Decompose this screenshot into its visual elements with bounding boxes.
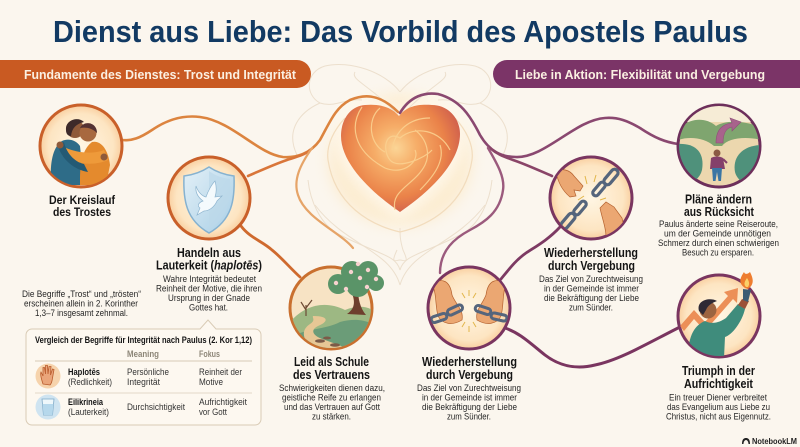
connector: restoration circle to forgiveness circle: [501, 227, 560, 279]
description: Schmerz durch einen schwierigen: [658, 238, 779, 249]
node: triumph in sincerity: [666, 272, 771, 422]
table row: Haplotes: Haplotēs: [68, 367, 100, 377]
description: zu stärken.: [312, 412, 351, 422]
connector: plans circle to heart: [400, 94, 678, 157]
section banner: foundations: Fundamente des Dienstes: Trost und Integrität: [24, 67, 297, 82]
side note on comfort: [22, 289, 141, 319]
connectors: orange branches from the heart: [122, 96, 398, 277]
icon: two people embracing: [40, 105, 122, 187]
heading: [156, 245, 262, 272]
section banner: love in action: Liebe in Aktion: Flexibilität und Vergebung: [515, 67, 765, 82]
description: Schwierigkeiten dienen dazu,: [279, 383, 385, 394]
central heart: [341, 105, 460, 212]
side note on comfort: 1,3–7 insgesamt zehnmal.: [35, 308, 128, 319]
table row: Eilikrineia: Eilikrineia: [68, 397, 103, 407]
icon: hands and breaking chain: [550, 157, 632, 239]
heading: Lauterkeit (haplotēs): [156, 258, 262, 272]
description: Christus, nicht aus Eigennutz.: [666, 412, 771, 422]
table column headers: Meaning: [127, 349, 159, 359]
connector: forgiveness circle to triumph circle: [505, 327, 680, 367]
heading: durch Vergebung: [548, 258, 635, 273]
heading: Leid als Schule: [294, 354, 369, 369]
heading: des Trostes: [53, 207, 111, 219]
node: restoration through forgiveness (lower): [417, 267, 521, 422]
table row: Haplotes: Integrität: [127, 377, 161, 387]
description: Besuch zu ersparen.: [682, 248, 754, 258]
connector: heart down to forgiveness circle: [440, 148, 503, 273]
connector: heart down to suffering circle: [296, 148, 353, 248]
heading: [684, 192, 755, 219]
section banner: foundations: [0, 60, 311, 88]
side note on comfort: erscheinen allein in 2. Korinther: [24, 298, 139, 310]
description: Paulus änderte seine Reiseroute,: [659, 219, 778, 230]
heading: aus Rücksicht: [684, 204, 755, 219]
heading: [293, 354, 370, 382]
heading: Pläne ändern: [685, 192, 752, 206]
description: Wahre Integrität bedeutet: [163, 274, 256, 285]
table column headers: Fokus: [199, 349, 220, 359]
heading: [49, 195, 115, 219]
connector: integrity circle to suffering circle: [241, 226, 300, 277]
description: [539, 274, 643, 314]
table title: Vergleich der Begriffe für Integrität nach Paulus (2. Kor 1,12): [35, 335, 252, 345]
icon: glass of water: [36, 394, 60, 420]
connector: integrity circle to heart: [248, 150, 310, 176]
heading: Wiederherstellung: [544, 245, 638, 260]
description: Das Ziel von Zurechtweisung: [417, 383, 521, 394]
icon: shield with dove: [168, 157, 250, 239]
icon: man raising a torch: [678, 272, 760, 358]
table row: Eilikrineia: [36, 394, 248, 420]
connector: comfort circle to heart: [122, 96, 398, 157]
node: acting from integrity: [156, 157, 262, 314]
description: [666, 392, 771, 422]
icon: tree and path landscape: [290, 261, 384, 352]
description: und das Vertrauen auf Gott: [284, 402, 380, 413]
description: [417, 383, 521, 422]
description: Das Ziel von Zurechtweisung: [539, 274, 643, 285]
heading: Triumph in der: [682, 363, 755, 378]
table row: Haplotes: [36, 364, 242, 388]
comparison table panel: [26, 320, 261, 425]
node: suffering as school of trust: [279, 261, 385, 422]
table row: Eilikrineia: vor Gott: [199, 407, 227, 417]
table column headers: [127, 349, 220, 359]
table row: Eilikrineia: Aufrichtigkeit: [199, 397, 248, 407]
side note on comfort: Die Begriffe „Trost“ und „trösten“: [22, 289, 141, 300]
heart glow and faint ornament lines: [293, 64, 507, 285]
description: das Evangelium aus Liebe zu: [667, 402, 770, 413]
table row: Eilikrineia: (Lauterkeit): [68, 407, 109, 417]
description: in der Gemeinde ist immer: [422, 392, 518, 404]
description: [156, 274, 262, 314]
node: changing plans out of consideration: [658, 105, 779, 258]
table row: Haplotes: Motive: [199, 377, 223, 387]
description: zum Sünder.: [569, 302, 613, 314]
node: restoration through forgiveness (upper): [539, 157, 643, 314]
description: um der Gemeinde unnötigen: [664, 228, 771, 240]
section banner: love in action: [493, 60, 800, 88]
node: cycle of comfort: [40, 105, 122, 219]
connectors: purple branches from the heart: [400, 94, 680, 367]
heading: Der Kreislauf: [49, 195, 115, 207]
connector: restoration circle to heart: [490, 148, 552, 176]
table row: Eilikrineia: Durchsichtigkeit: [127, 402, 186, 412]
description: die Bekräftigung der Liebe: [544, 293, 639, 304]
description: Reinheit der Motive, die ihren: [156, 284, 262, 294]
icon: person at a fork in the road: [678, 105, 762, 187]
description: [279, 383, 385, 422]
heading: [422, 354, 517, 382]
heading: durch Vergebung: [426, 367, 513, 382]
heading: [544, 245, 638, 273]
title: Dienst aus Liebe: Das Vorbild des Apostels Paulus: [53, 14, 748, 49]
description: Gottes hat.: [189, 302, 228, 314]
icon: open hand: [36, 364, 60, 388]
heading: des Vertrauens: [293, 367, 370, 382]
description: Ein treuer Diener verbreitet: [669, 392, 767, 404]
description: [658, 219, 779, 258]
heading: Aufrichtigkeit: [684, 376, 754, 391]
heading: Handeln aus: [177, 245, 241, 260]
icon: two hands breaking a chain: [428, 267, 510, 349]
description: die Bekräftigung der Liebe: [422, 402, 517, 413]
table row: Haplotes: (Redlichkeit): [68, 377, 112, 387]
heading: Wiederherstellung: [422, 354, 517, 369]
table row: Haplotes: Reinheit der: [199, 367, 242, 377]
table row: Haplotes: Persönliche: [127, 367, 169, 377]
description: zum Sünder.: [447, 412, 491, 422]
heading: [682, 363, 755, 391]
description: Ursprung in der Gnade: [168, 293, 250, 304]
description: in der Gemeinde ist immer: [544, 284, 640, 294]
description: geistliche Reife zu erlangen: [282, 392, 381, 404]
